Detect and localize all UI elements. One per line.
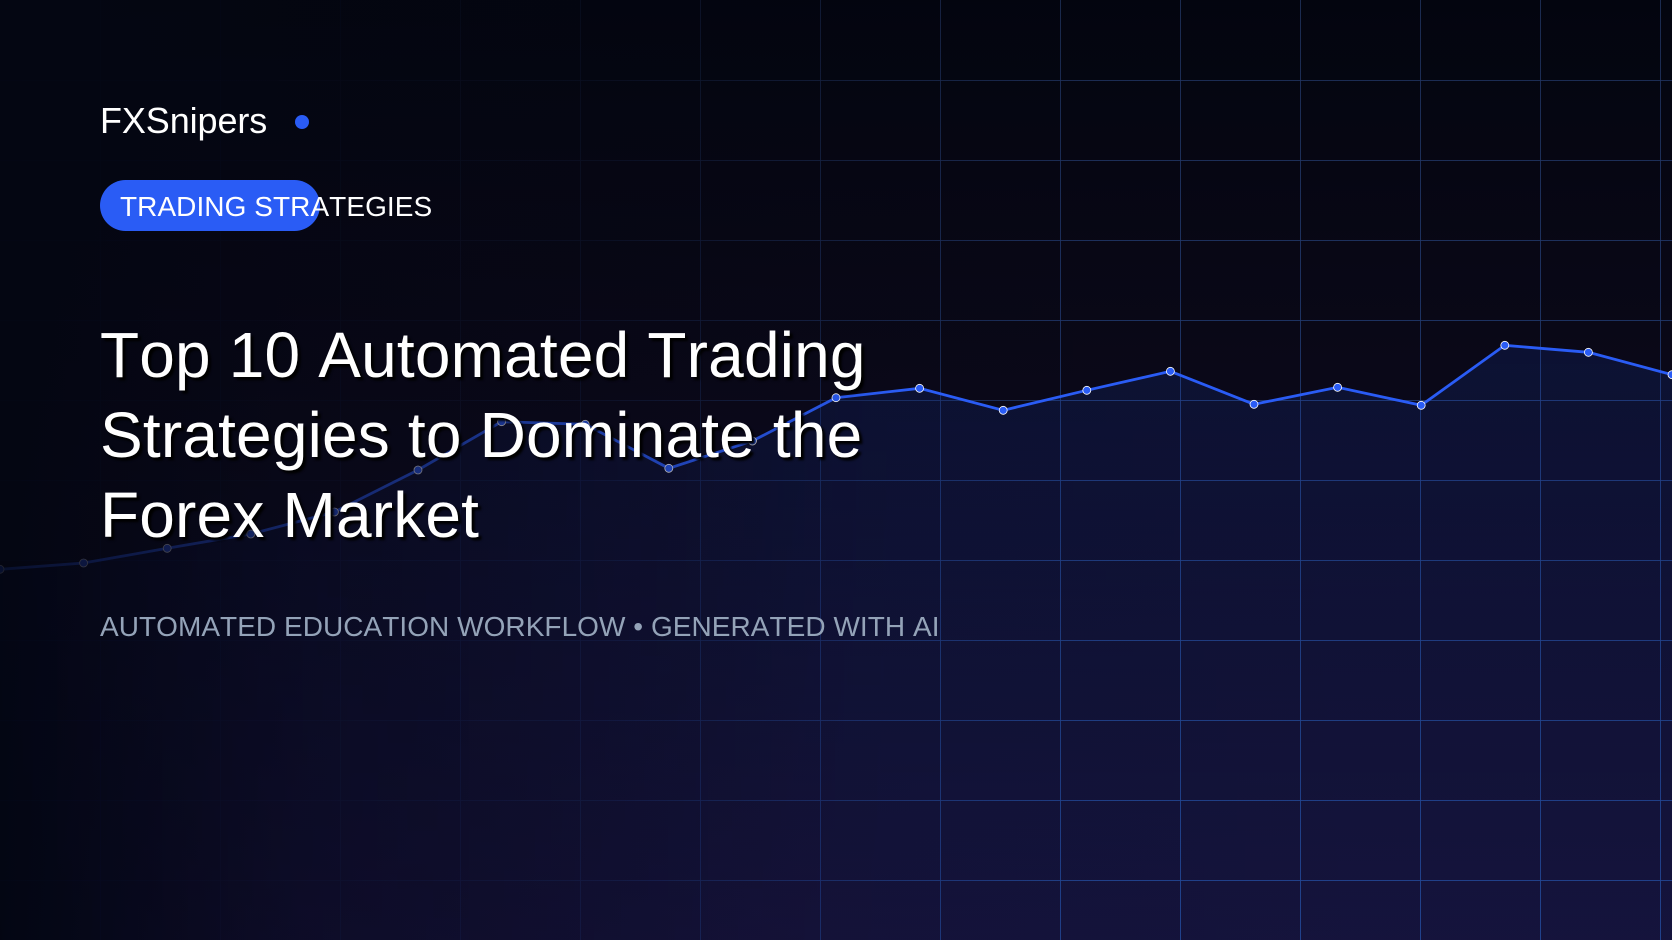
chart: price line (0, 340, 1672, 940)
logo: FXSnipers (100, 100, 267, 141)
logo dot (295, 115, 309, 129)
title: Strategies to Dominate the (100, 399, 862, 471)
title: Top 10 Automated Trading (100, 319, 866, 391)
grid (379, 0, 1672, 940)
title: Forex Market (100, 479, 479, 551)
title (100, 319, 866, 551)
subtitle: AUTOMATED EDUCATION WORKFLOW • GENERATED WITH AI (100, 611, 940, 642)
tag pill: TRADING STRATEGIES (120, 191, 432, 222)
tag pill (100, 180, 320, 231)
